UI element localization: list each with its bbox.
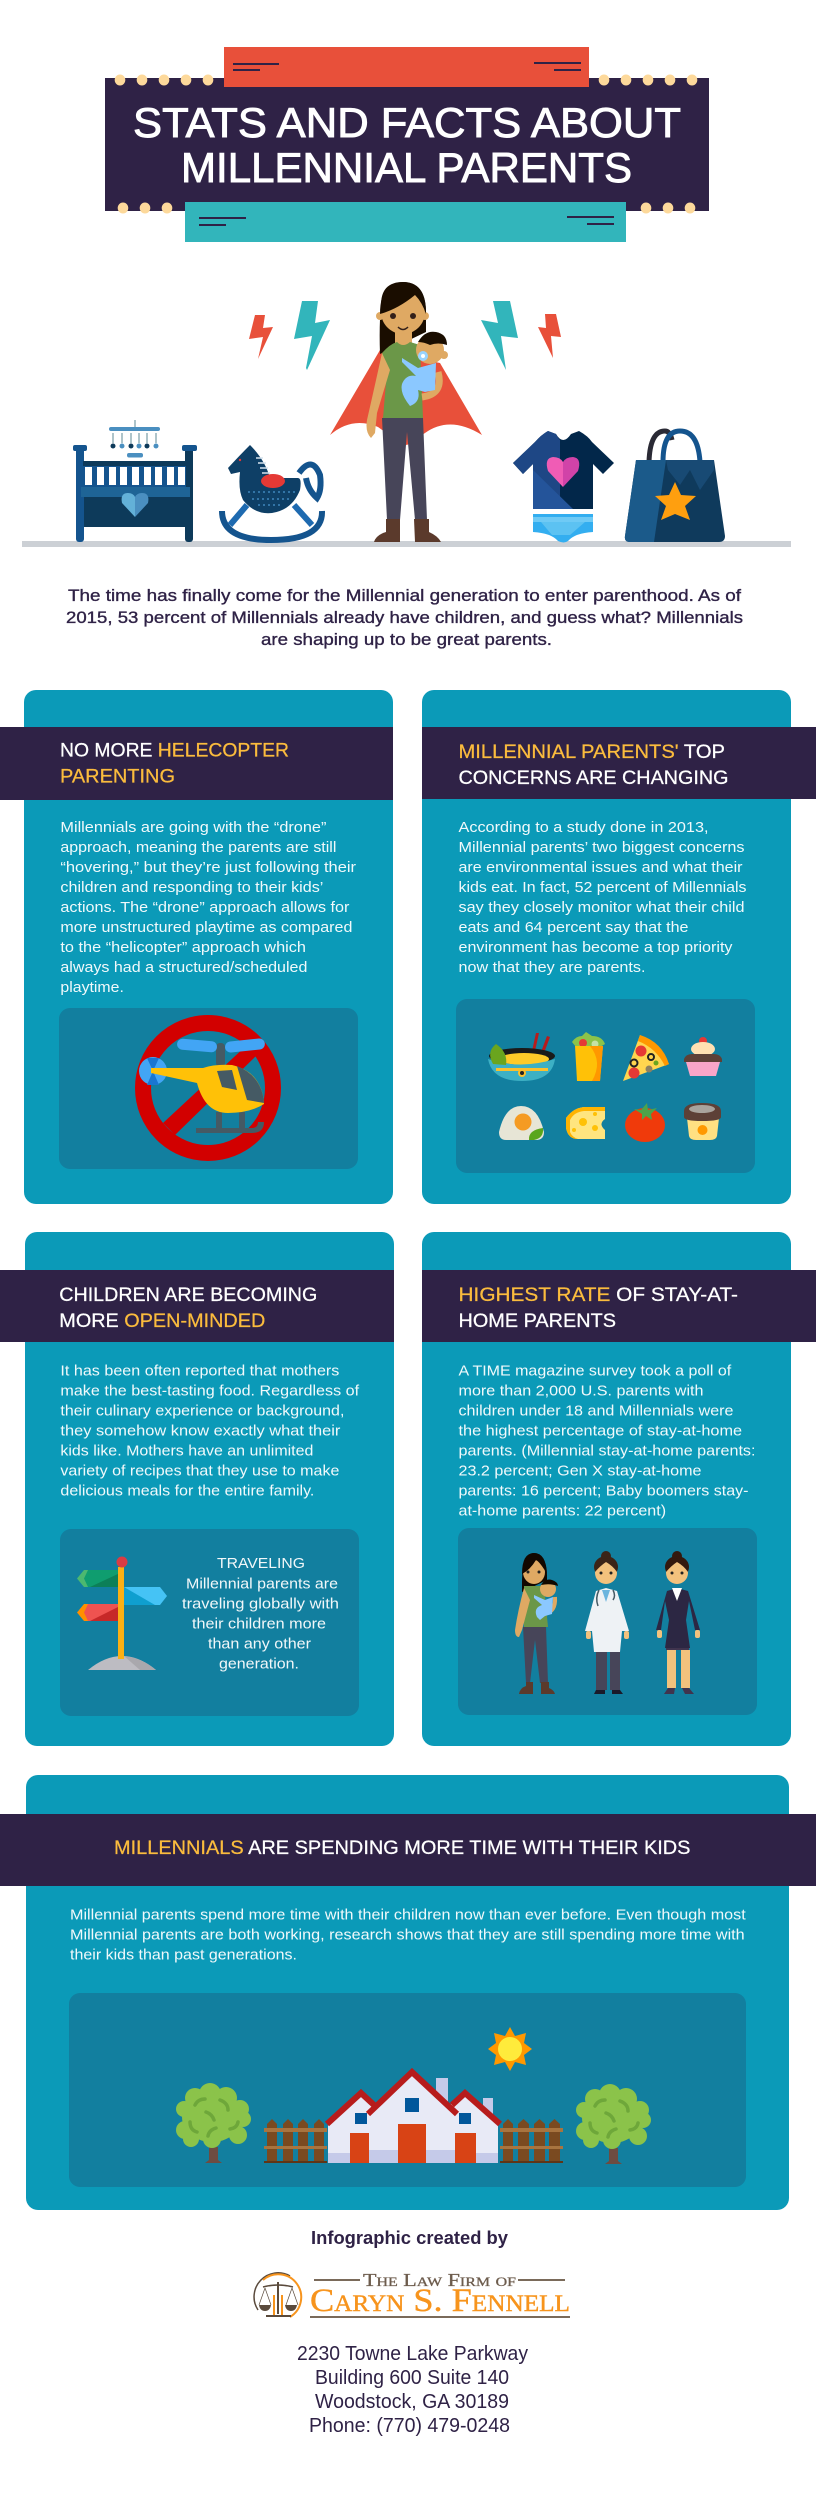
icon: wrap	[572, 1032, 605, 1081]
body text: Millennial parents spend more time with their children now than ever before. Even though most	[70, 1906, 747, 1923]
body text: delicious meals for the entire family.	[60, 1482, 314, 1499]
text block: traveling: TRAVELING	[217, 1555, 305, 1572]
panel: highest rate of stay-at-home parents	[422, 1232, 816, 1746]
hero illustration	[22, 282, 791, 547]
address block: Phone: (770) 479-0248	[309, 2415, 510, 2437]
body text: their culinary experience or background,	[60, 1402, 344, 1419]
body text: Millennial parents are both working, research shows that they are still spending more time with	[70, 1926, 745, 1943]
body text: parents: 16 percent; Baby boomers stay-	[458, 1482, 748, 1499]
title text	[133, 99, 681, 191]
body text: children under 18 and Millennials were	[458, 1402, 734, 1419]
intro text: 2015, 53 percent of Millennials already have children, and guess what? Millennials	[66, 608, 743, 627]
body text	[60, 1362, 360, 1499]
panel: spending more time with their kids	[0, 1775, 816, 2210]
address block	[297, 2343, 528, 2437]
icon: no helicopter sign	[139, 1023, 273, 1153]
body text: make the best-tasting food. Regardless of	[60, 1382, 360, 1399]
heading band	[0, 1814, 816, 1886]
title text: STATS AND FACTS ABOUT	[133, 99, 681, 146]
title banner	[105, 47, 709, 242]
icon: left fence	[264, 2119, 327, 2163]
heading band: NO MORE HELECOPTER	[60, 740, 289, 762]
body text: are environmental issues and what their	[458, 859, 742, 876]
logo: law firm of Caryn S. Fennell: The Law Firm of	[363, 2270, 516, 2290]
body text	[458, 1362, 756, 1519]
heading band: MILLENNIALS ARE SPENDING MORE TIME WITH THEIR KIDS	[114, 1838, 690, 1859]
body text: the highest percentage of stay-at-home	[458, 1422, 742, 1439]
heading band	[0, 727, 393, 800]
icon: right tree	[576, 2084, 651, 2164]
icon: cup	[684, 1103, 721, 1140]
text block: traveling: than any other	[208, 1635, 311, 1652]
icon: noodle bowl	[488, 1033, 555, 1081]
icon: signpost	[77, 1556, 167, 1670]
title text: MILLENNIAL PARENTS	[181, 144, 632, 191]
body text: they somehow know exactly what their	[60, 1422, 340, 1439]
icon: diaper bag with star	[625, 431, 725, 542]
heading band: HIGHEST RATE OF STAY-AT-	[458, 1285, 738, 1306]
icon: tomato	[625, 1103, 665, 1142]
icon: scales of justice	[254, 2273, 301, 2317]
body text: It has been often reported that mothers	[60, 1362, 339, 1379]
body text: their kids than past generations.	[70, 1946, 297, 1963]
body text: more unstructured playtime as compared	[60, 919, 352, 936]
heading band	[422, 1270, 816, 1342]
body text: Millennial parents’ two biggest concerns	[458, 839, 744, 856]
icon: left tree	[176, 2083, 251, 2163]
body text: to the “helicopter” approach which	[60, 939, 306, 956]
heading band: MILLENNIAL PARENTS' TOP	[458, 742, 725, 763]
text block: traveling: Millennial parents are	[186, 1576, 338, 1592]
text block: traveling: traveling globally with	[182, 1595, 339, 1612]
body text: playtime.	[60, 979, 124, 996]
body text: kids like. Mothers have an unlimited	[60, 1442, 313, 1459]
body text: According to a study done in 2013,	[458, 819, 708, 836]
body text: say they closely monitor what their child	[458, 899, 744, 916]
body text: kids eat. In fact, 52 percent of Millennials	[458, 879, 746, 896]
body text: more than 2,000 U.S. parents with	[458, 1382, 704, 1399]
body text: parents. (Millennial stay-at-home parents:	[458, 1442, 756, 1459]
body text	[458, 819, 746, 976]
icon: doctor	[585, 1551, 629, 1694]
body text: “hovering,” but they’re just following their	[60, 859, 356, 876]
icon: house	[327, 2072, 500, 2163]
icon: crib with mobile	[73, 420, 197, 542]
icon: mother with cape and baby	[330, 282, 482, 542]
body text: children and responding to their kids’	[60, 879, 323, 896]
icon: sun	[488, 2027, 532, 2071]
body text: actions. The “drone” approach allows for	[60, 899, 349, 916]
text block: traveling: their children more	[192, 1615, 326, 1632]
heading band	[422, 727, 816, 799]
heading band: CHILDREN ARE BECOMING	[59, 1285, 317, 1306]
panel: millennial parents' top concerns	[422, 690, 816, 1204]
intro text: are shaping up to be great parents.	[261, 630, 552, 649]
logo: law firm of Caryn S. Fennell	[254, 2270, 570, 2319]
body text: at-home parents: 22 percent)	[458, 1502, 666, 1519]
body text: now that they are parents.	[458, 959, 646, 976]
body text: A TIME magazine survey took a poll of	[458, 1362, 732, 1379]
intro text: The time has finally come for the Millennial generation to enter parenthood. As of	[68, 586, 741, 605]
body text: approach, meaning the parents are still	[60, 839, 336, 856]
address block: 2230 Towne Lake Parkway	[297, 2343, 528, 2365]
heading band: CONCERNS ARE CHANGING	[458, 768, 728, 789]
body text: Millennials are going with the “drone”	[60, 819, 326, 836]
icon: mother with baby	[515, 1553, 558, 1694]
icon: cheese	[566, 1107, 605, 1139]
heading band: MORE OPEN-MINDED	[59, 1311, 265, 1332]
icon: pizza slice	[623, 1035, 669, 1081]
heading band: HOME PARENTS	[458, 1311, 616, 1332]
icon: rocking horse	[222, 445, 322, 540]
body text: environment has become a top priority	[458, 939, 733, 956]
heading band	[0, 1270, 394, 1342]
intro text	[66, 586, 743, 649]
address block: Building 600 Suite 140	[315, 2367, 509, 2389]
icon: businesswoman	[656, 1551, 700, 1694]
body text	[60, 819, 356, 996]
ground line	[22, 541, 791, 547]
icon: t-shirt	[513, 431, 614, 511]
body text: always had a structured/scheduled	[60, 959, 307, 976]
text block: traveling	[182, 1555, 339, 1672]
logo: law firm of Caryn S. Fennell: Caryn S. Fennell	[310, 2283, 570, 2319]
credit line: Infographic created by	[311, 2228, 508, 2248]
body text	[70, 1906, 747, 1963]
text block: traveling: generation.	[219, 1655, 299, 1672]
icon: egg	[499, 1106, 544, 1140]
address block: Woodstock, GA 30189	[315, 2391, 509, 2413]
icon: right fence	[500, 2119, 563, 2163]
panel: children are becoming more open-minded	[0, 1232, 394, 1746]
icon: diaper	[533, 514, 593, 542]
icon: cupcake	[684, 1037, 722, 1076]
body text: variety of recipes that they use to make	[60, 1462, 339, 1479]
body text: eats and 64 percent say that the	[458, 919, 688, 936]
panel: no more helicopter parenting	[0, 690, 393, 1204]
icon: lightning bolts	[249, 301, 561, 370]
heading band: PARENTING	[60, 766, 175, 788]
body text: 23.2 percent; Gen X stay-at-home	[458, 1462, 702, 1479]
